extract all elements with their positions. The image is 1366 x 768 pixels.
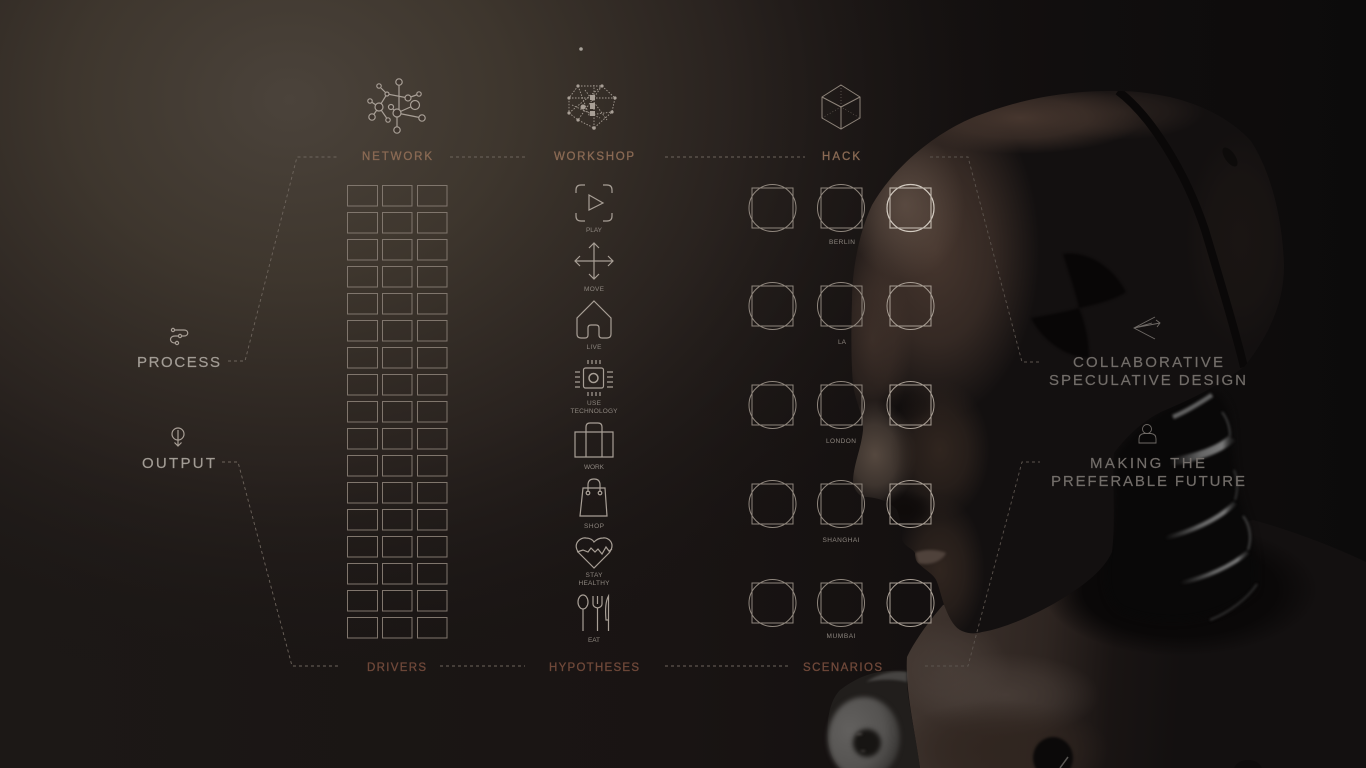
label: stay healthy [578,572,610,587]
dummy body and shoulder [906,595,1125,768]
label: eat: EAT [588,637,600,644]
icon: live [577,301,611,338]
heading: collaborative speculative design: COLLABORATIVE [1073,354,1223,371]
label: use technology: TECHNOLOGY [570,408,618,415]
small dot [579,47,583,51]
label: use technology: USE [587,400,602,407]
shoulder joint disc [828,671,1262,768]
column: network and drivers [348,79,447,674]
heading: collaborative speculative design: SPECULATIVE DESIGN [1049,372,1246,389]
heading: hypotheses: HYPOTHESES [549,662,639,674]
label: shop: SHOP [584,523,604,530]
icon: shop [580,479,607,516]
heading: making the preferable future: PREFERABLE FUTURE [1051,473,1245,490]
process label [137,328,220,371]
label: play: PLAY [586,227,603,234]
heading: workshop: WORKSHOP [554,151,634,163]
dashed connector lines [222,157,1040,666]
city scenarios grid [749,184,934,640]
heading: hack: HACK [822,151,860,163]
row: shanghai: SHANGHAI [822,537,860,544]
icon: speculative arrows [1134,317,1160,339]
heading: collaborative speculative design [1049,354,1246,389]
heading: drivers: DRIVERS [367,662,426,674]
row: london [749,382,934,445]
heading: output: OUTPUT [142,455,215,472]
row: london: LONDON [826,438,856,445]
label: move: MOVE [584,286,605,293]
label: use technology [570,400,618,415]
neck spring [1042,392,1318,656]
heading: process: PROCESS [137,354,220,371]
callout: collaborative speculative design [1049,317,1246,389]
row: la [749,282,934,346]
row: mumbai [749,580,934,640]
highlighted circle on head [887,184,934,232]
icon: stay healthy [576,538,612,568]
row: mumbai: MUMBAI [826,633,856,640]
icon: process path [170,328,188,345]
icon: use technology [575,360,613,396]
image: crash-test dummy figure [826,91,1284,768]
column: hack and scenarios [749,85,934,674]
row: shanghai [749,480,934,544]
label: stay healthy: HEALTHY [578,580,610,587]
icon: cube [822,85,860,129]
row: la: LA [838,339,847,346]
shoulder bolt holes [1033,737,1262,768]
row: berlin: BERLIN [829,239,855,246]
label: work: WORK [584,464,605,471]
heading: making the preferable future [1051,455,1245,490]
column: workshop and hypotheses [549,84,639,674]
icon: play [576,185,612,221]
icon: eat [578,595,608,631]
icon: output arrow [172,428,184,446]
icon: workshop [567,84,617,130]
icon: person [1139,424,1156,443]
callout: making the preferable future [1051,424,1245,490]
dummy head [852,91,1284,634]
output label [142,428,215,472]
heading: network: NETWORK [362,151,432,163]
icon: work [575,423,613,457]
drivers grid [348,186,447,638]
heading: making the preferable future: MAKING THE [1090,455,1205,472]
heading: scenarios: SCENARIOS [803,662,882,674]
row: berlin [749,184,934,246]
icon: network [368,79,425,133]
label: stay healthy: STAY [586,572,603,579]
label: live: LIVE [586,344,602,351]
icon: move [575,243,613,279]
